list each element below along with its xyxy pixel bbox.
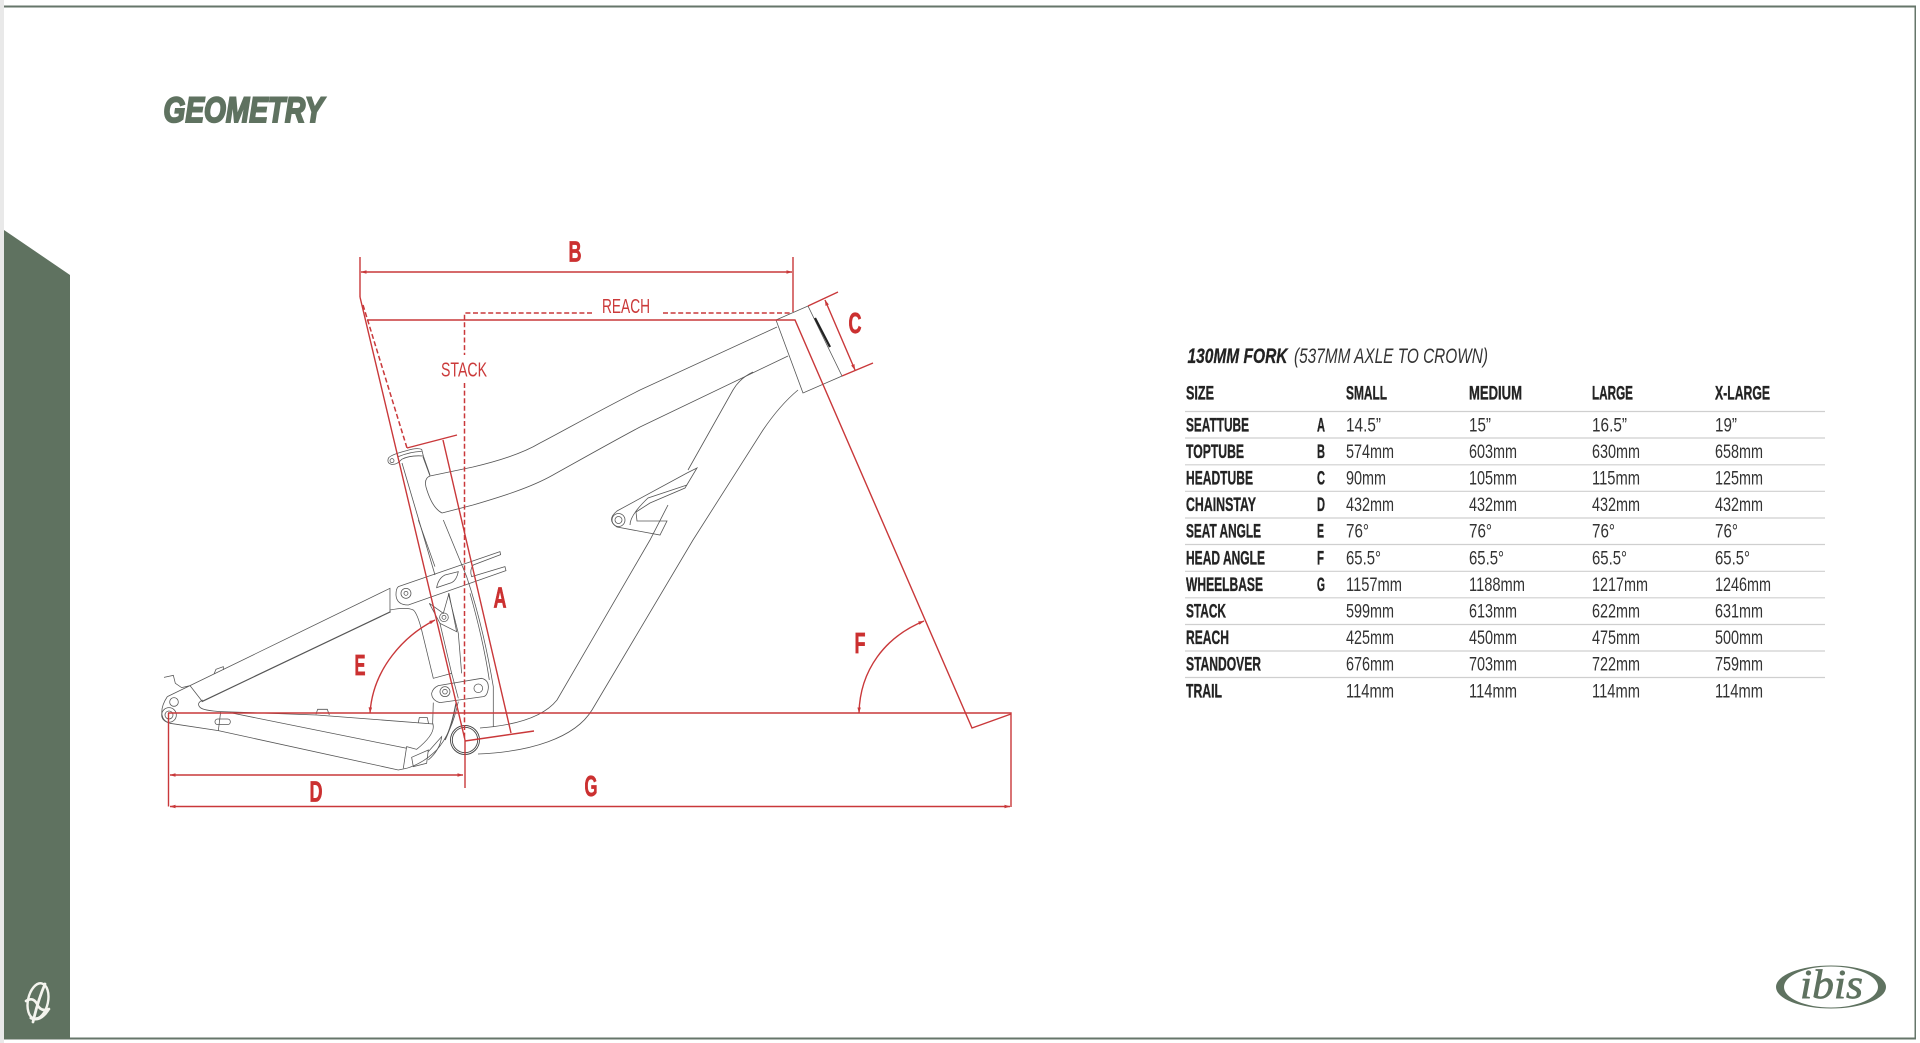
table heading <box>1188 345 1488 368</box>
row: seattube: 14.5” <box>1346 414 1381 436</box>
row: reach: 425mm <box>1346 627 1394 649</box>
row: wheelbase: WHEELBASE <box>1186 574 1263 596</box>
seat collar <box>388 449 430 475</box>
ibis logo <box>1776 961 1886 1008</box>
row: head angle: 65.5° <box>1715 547 1750 569</box>
geometry table <box>1185 382 1825 702</box>
row: head angle: 65.5° <box>1469 547 1504 569</box>
row: trail: TRAIL <box>1186 680 1222 702</box>
panel: green side band <box>4 230 70 1039</box>
row: reach <box>1186 627 1763 649</box>
row: trail: 114mm <box>1469 680 1517 702</box>
row: headtube: 115mm <box>1592 468 1640 490</box>
row: wheelbase: 1157mm <box>1346 574 1402 596</box>
dimension F: F <box>854 628 866 660</box>
row: headtube: C <box>1317 468 1325 490</box>
row: seattube: SEATTUBE <box>1186 414 1249 436</box>
title: GEOMETRY <box>164 91 326 130</box>
header row <box>1186 382 1770 404</box>
effective top tube and seat angle line <box>360 297 1011 740</box>
row: trail <box>1186 680 1763 702</box>
dimension A <box>407 435 534 741</box>
row: headtube: 125mm <box>1715 468 1763 490</box>
dimension G: G <box>584 771 598 803</box>
row: headtube: HEADTUBE <box>1186 468 1253 490</box>
row: stack: 599mm <box>1346 601 1394 623</box>
row: seattube: A <box>1317 414 1325 436</box>
row: chainstay: CHAINSTAY <box>1186 494 1256 516</box>
row: chainstay: 432mm <box>1469 494 1517 516</box>
row: toptube: TOPTUBE <box>1186 441 1244 463</box>
header row: X-LARGE <box>1715 382 1770 404</box>
row: headtube: 90mm <box>1346 468 1386 490</box>
header row: LARGE <box>1592 382 1633 404</box>
row: wheelbase: 1188mm <box>1469 574 1525 596</box>
dimension lines <box>168 236 1011 808</box>
row: headtube: 105mm <box>1469 468 1517 490</box>
row: head angle: 65.5° <box>1346 547 1381 569</box>
row: chainstay: 432mm <box>1592 494 1640 516</box>
dimension C <box>808 292 873 376</box>
row: head angle: 65.5° <box>1592 547 1627 569</box>
row: seattube: 15” <box>1469 414 1491 436</box>
dimension B <box>360 236 793 312</box>
row: chainstay: D <box>1317 494 1325 516</box>
row: trail: 114mm <box>1346 680 1394 702</box>
label: reach: REACH <box>602 295 650 318</box>
dimension F <box>854 621 924 713</box>
table heading: (537MM AXLE TO CROWN) <box>1294 345 1488 368</box>
row: standover: 703mm <box>1469 654 1517 676</box>
row: wheelbase: 1246mm <box>1715 574 1771 596</box>
front triangle <box>402 306 842 754</box>
row: reach: 500mm <box>1715 627 1763 649</box>
row: wheelbase: 1217mm <box>1592 574 1648 596</box>
row: stack: 631mm <box>1715 601 1763 623</box>
row: reach: 450mm <box>1469 627 1517 649</box>
row: seat angle <box>1186 521 1738 543</box>
row: chainstay <box>1186 494 1763 516</box>
row: standover: STANDOVER <box>1186 654 1261 676</box>
ibis logo: ibis <box>1800 961 1863 1007</box>
row: head angle <box>1186 547 1750 569</box>
reach and stack dashed lines <box>363 305 792 740</box>
row: chainstay: 432mm <box>1346 494 1394 516</box>
row: seattube: 16.5” <box>1592 414 1627 436</box>
row: seat angle: 76° <box>1592 521 1615 543</box>
header row: SMALL <box>1346 382 1387 404</box>
row: standover: 722mm <box>1592 654 1640 676</box>
row: toptube: 603mm <box>1469 441 1517 463</box>
chainstay yoke <box>403 703 433 768</box>
header row: SIZE <box>1186 382 1214 404</box>
row: seat angle: 76° <box>1346 521 1369 543</box>
cable detail <box>815 318 830 347</box>
row: stack <box>1186 600 1763 622</box>
row: standover <box>1186 654 1763 676</box>
row: toptube: 658mm <box>1715 441 1763 463</box>
row: seat angle: E <box>1317 521 1324 543</box>
row: seat angle: 76° <box>1469 521 1492 543</box>
row: wheelbase <box>1186 574 1771 596</box>
row: head angle: HEAD ANGLE <box>1186 547 1265 569</box>
row: seattube <box>1186 414 1737 436</box>
dimension G <box>168 713 1011 807</box>
dimension B: B <box>568 236 582 268</box>
lower link <box>432 678 488 703</box>
row: toptube <box>1186 441 1763 463</box>
dimension D: D <box>310 776 322 808</box>
dimension E <box>354 620 435 713</box>
row: toptube: 630mm <box>1592 441 1640 463</box>
row: stack: STACK <box>1186 601 1226 623</box>
shock mount <box>612 468 697 535</box>
row: trail: 114mm <box>1715 680 1763 702</box>
row: seat angle: 76° <box>1715 521 1738 543</box>
bottom bracket <box>450 726 480 754</box>
row: toptube: 574mm <box>1346 441 1394 463</box>
row: seattube: 19” <box>1715 414 1737 436</box>
dimension A: A <box>494 582 507 614</box>
row: stack: 613mm <box>1469 601 1517 623</box>
dimension E: E <box>354 650 366 682</box>
row: standover: 759mm <box>1715 654 1763 676</box>
row: trail: 114mm <box>1592 680 1640 702</box>
rocker <box>396 552 506 605</box>
header row: MEDIUM <box>1469 382 1522 404</box>
icon: ibis bird emblem <box>24 981 52 1022</box>
dimension C: C <box>848 308 862 340</box>
shock bolt mount <box>429 593 457 632</box>
row: reach: REACH <box>1186 627 1229 649</box>
row: chainstay: 432mm <box>1715 494 1763 516</box>
bike frame drawing <box>162 306 842 770</box>
label: stack: STACK <box>441 358 487 382</box>
table heading: 130MM FORK <box>1188 345 1289 368</box>
row: headtube <box>1186 468 1763 490</box>
row: stack: 622mm <box>1592 601 1640 623</box>
row: seat angle: SEAT ANGLE <box>1186 521 1261 543</box>
row: toptube: B <box>1317 441 1325 463</box>
row: wheelbase: G <box>1317 574 1325 596</box>
row: standover: 676mm <box>1346 654 1394 676</box>
table rules <box>1185 412 1825 678</box>
row: reach: 475mm <box>1592 627 1640 649</box>
rear triangle and suspension <box>162 520 506 770</box>
row: head angle: F <box>1317 547 1324 569</box>
